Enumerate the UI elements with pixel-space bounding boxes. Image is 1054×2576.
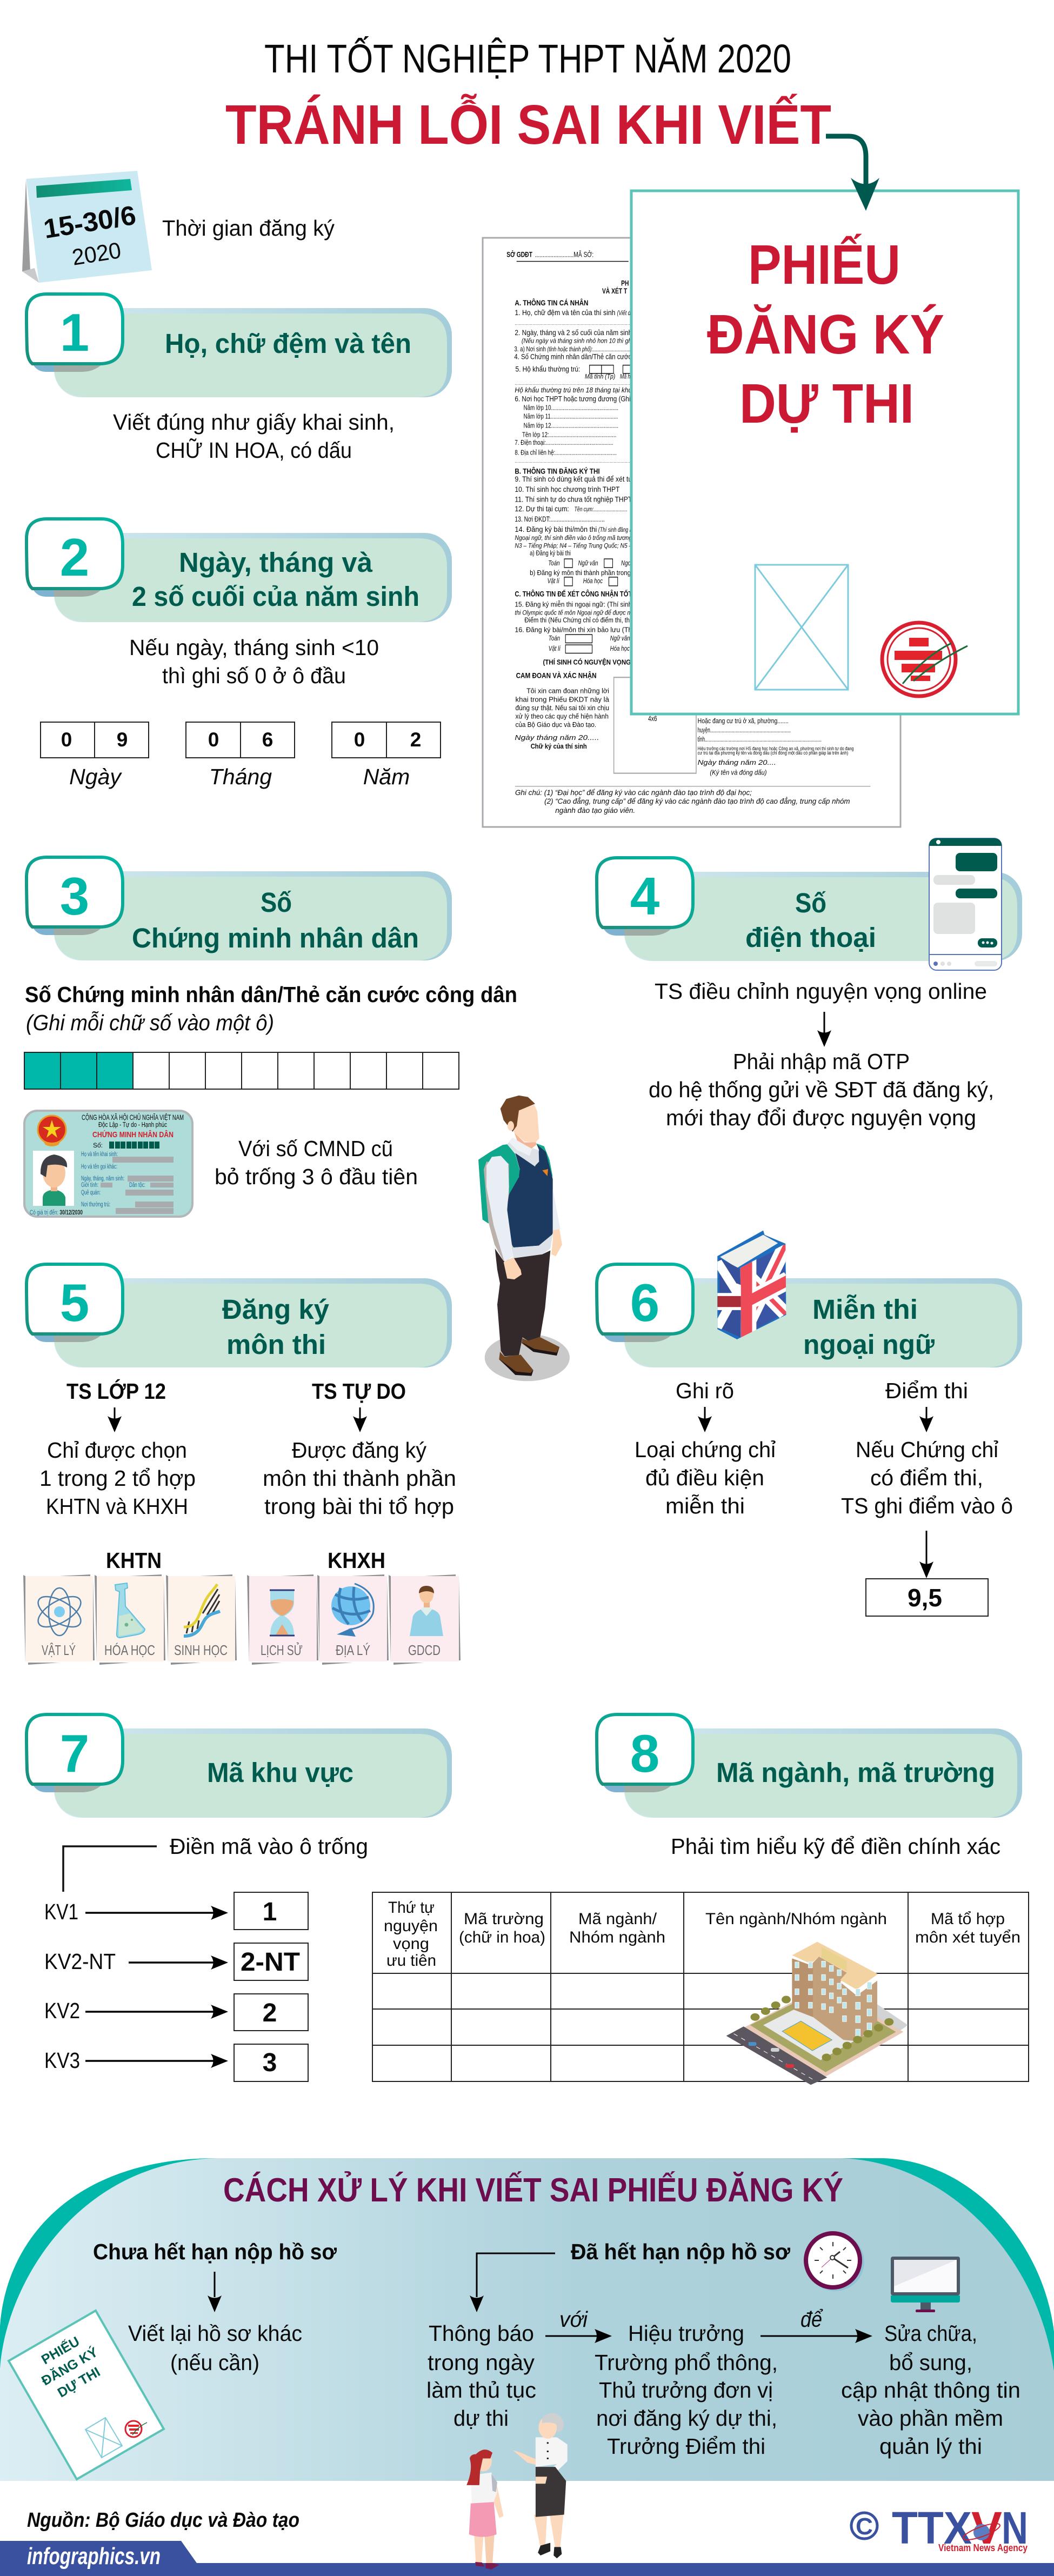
panel: sample registration form (back sheet): khai trong Phiếu ĐKDT này là (516, 696, 610, 704)
text: step 2 detail: thì ghi số 0 ở ô đầu (162, 663, 346, 688)
heading: step 3: Số (261, 887, 292, 918)
chart: area codes: 1 (263, 1898, 277, 1926)
panel: sample registration form (back sheet): 12. Dự thi tại cụm: (515, 505, 569, 513)
panel: step 4 phone: 4 (630, 866, 659, 926)
chart: date input boxes: 6 (262, 729, 273, 751)
panel: sample registration form (back sheet): 3. a) Nơi sinh (tỉnh hoặc thành phố):............................. (514, 345, 630, 353)
text: notify within the day: Thông báo (429, 2321, 534, 2346)
text: note the certificate: miễn thi (665, 1493, 745, 1518)
panel: sample registration form (back sheet): Hóa học (583, 577, 603, 585)
panel: sample registration form (back sheet): 15. Đăng ký miễn thi ngoại ngữ: (Thí sinh (515, 600, 632, 609)
heading: step 2: 2 số cuối của năm sinh (132, 581, 419, 612)
icon: teacher woman (512, 2413, 568, 2558)
panel: sample registration form (back sheet): Mã tỉnh (Tp) (585, 373, 615, 381)
icon: ID card illustration: Nơi thường trú: (81, 1202, 110, 1208)
panel: sample registration form (back sheet): 16. Đăng ký bài/môn thi xin bảo lưu (Th (515, 626, 632, 634)
panel: sample registration form (back sheet): 10. Thí sinh học chương trình THPT (515, 485, 620, 494)
chart: area codes: 2-NT (241, 1948, 300, 1977)
panel: sample registration form (back sheet): Ngoại ngữ, thí sinh điền vào ô trống mã tương (515, 535, 632, 542)
text: before deadline: Chưa hết hạn nộp hồ sơ (93, 2239, 337, 2264)
panel: step 3 ID number (26, 857, 452, 960)
text: independent candidates: môn thi thành phần (263, 1466, 456, 1491)
icon: clock (806, 2233, 864, 2291)
panel: sample registration form (back sheet): .............................................................................................................................. (515, 458, 675, 464)
heading: step 6: Miễn thi (812, 1294, 918, 1325)
chart: date input boxes: Năm (363, 764, 410, 789)
panel: sample registration form (back sheet): 5. Hộ khẩu thường trú: (516, 365, 580, 373)
icon: civics card (389, 1574, 461, 1665)
text: independent candidates: TS TỰ DO (312, 1379, 406, 1404)
chart: area codes: KV3 (44, 2048, 80, 2073)
icon: geography card: ĐỊA LÝ (336, 1642, 370, 1658)
icon: civics card: GDCD (408, 1642, 441, 1658)
panel: sample registration form (back sheet): Ngoại (621, 559, 635, 567)
panel: sample registration form (back sheet): Vật lí (549, 645, 561, 653)
heading: step 6: ngoại ngữ (803, 1329, 935, 1360)
icon: tilted form (9, 2311, 164, 2479)
icon: TTXVN logo: TTX (892, 2502, 972, 2553)
panel: sample registration form (back sheet): 6. Nơi học THPT hoặc tương đương (Ghi (515, 395, 631, 403)
callout: score example: 9,5 (908, 1584, 942, 1612)
chart: wishes table: (chữ in hoa) (459, 1928, 545, 1946)
text: ID number heading (25, 982, 517, 1035)
icon: photo placeholder (755, 565, 848, 690)
text: grade 12 candidates (39, 1379, 196, 1519)
heading: form title (707, 233, 944, 435)
panel: sample registration form (back sheet): Hiệu trưởng các trường nơi HS đang học hoặc Công an xã, phường nơi thí sinh tự do đang (698, 746, 854, 751)
icon: geography card (317, 1574, 389, 1665)
text: step 4 detail: mới thay đổi được nguyện vọng (666, 1105, 976, 1130)
chart: wishes table: môn xét tuyển (915, 1928, 1020, 1946)
panel: sample registration form (back sheet): huyện............................................................... (698, 727, 791, 735)
heading: step 4: điện thoại (745, 922, 876, 953)
panel: sample registration form (back sheet): Tên lớp 12:.............................................. (522, 431, 616, 439)
text: note the certificate: đủ điều kiện (645, 1465, 764, 1490)
icon: student with backpack (478, 1096, 570, 1381)
panel: sample registration form (back sheet): (THÍ SINH CÓ NGUYỆN VỌNG (543, 658, 631, 666)
icon: TTXVN logo: V (971, 2502, 1002, 2553)
heading: step 6 (803, 1294, 935, 1360)
icon: ID card illustration: Độc Lập - Tự do - Hạnh phúc (98, 1120, 167, 1129)
text: step 2 detail (129, 635, 379, 688)
panel: sample registration form (back sheet): Toán (549, 635, 560, 642)
panel: sample registration form (back sheet): a) Đăng ký bài thi (530, 549, 571, 557)
text: exam score (841, 1378, 1013, 1518)
panel: sample registration form (back sheet): 2. Ngày, tháng và 2 số cuối của năm sinh (515, 328, 632, 337)
heading: step 3 (132, 887, 419, 953)
panel: step 6 language exemption: 6 (630, 1273, 659, 1332)
chart: area codes (44, 1892, 308, 2081)
chart: date input boxes: 2 (410, 729, 421, 751)
chart: wishes table: Nhóm ngành (569, 1928, 665, 1946)
icon: tilted form: DỰ THI (55, 2364, 103, 2401)
text: independent candidates (263, 1379, 456, 1519)
text: notify within the day (426, 2321, 536, 2431)
chart: date input boxes: Ngày (69, 764, 122, 789)
panel: step 4 phone (597, 838, 1022, 970)
text: correct data (841, 2321, 1020, 2459)
text: note the certificate: Loại chứng chỉ (635, 1437, 776, 1462)
panel: sample registration form (back sheet): xử lý theo các quy chế hiện hành (516, 712, 609, 720)
panel: sample registration form (back sheet): cư trú tại địa phương ký tên và đóng dấu (chỉ đóng một dấu có phần giáp lai trên ảnh) (698, 750, 849, 756)
panel: sample registration form (back sheet): 13. Nơi ĐKDT:................................... (515, 515, 605, 524)
text: principals: Trưởng Điểm thi (607, 2434, 765, 2459)
arrow: with: với (559, 2307, 589, 2332)
heading: step 5: môn thi (226, 1329, 326, 1360)
panel: sample registration form (back sheet): SỞ GDĐT (506, 250, 532, 259)
icon: ID card illustration: Họ và tên khai sinh: (81, 1151, 118, 1158)
text: website: infographics.vn (27, 2543, 161, 2570)
icon: computer monitor (891, 2257, 960, 2312)
icon: ID card illustration: Số: (93, 1142, 103, 1149)
panel: sample registration form (back sheet): Mã huyện (620, 373, 641, 381)
arrow: bracket to KV1 (63, 1846, 157, 1892)
panel: sample registration form (back sheet): Hoặc đang cư trú ở xã, phường....... (698, 718, 789, 725)
text: old ID note: bỏ trống 3 ô đầu tiên (215, 1164, 418, 1189)
chart: wishes table: Mã ngành/ (578, 1910, 657, 1928)
panel: sample registration form (back sheet): Ngữ văn (610, 635, 630, 642)
panel: sample registration form (back sheet): ngành đào tạo giáo viên. (555, 806, 635, 815)
text: step 1 detail: CHỮ IN HOA, có dấu (156, 438, 352, 463)
panel: step 6 language exemption (597, 1231, 1022, 1367)
text: grade 12 candidates: Chỉ được chọn (47, 1438, 187, 1463)
icon: chemistry card (95, 1574, 165, 1665)
panel: sample registration form (back sheet): 11. Thí sinh tự do chưa tốt nghiệp THPT (515, 495, 632, 504)
icon: calendar with registration dates: 15-30/6 (42, 200, 138, 244)
text: exam score: Nếu Chứng chỉ (856, 1437, 998, 1462)
panel: sample registration form (back sheet): 4x6 (648, 714, 657, 723)
panel: step 1 name (26, 294, 452, 397)
panel: step 8 major and school code (597, 1714, 1022, 1818)
panel: step 7 area code: 7 (60, 1724, 89, 1783)
icon: portrait photo (33, 1151, 74, 1206)
panel: sample registration form (back sheet): .............................................................................................................................. (515, 381, 675, 386)
panel: sample registration form (back sheet): Ngày tháng năm 20.... (698, 759, 776, 767)
panel: sample registration form (back sheet): Điểm thi (Nếu Chứng chỉ có điểm thi, thí (524, 617, 631, 624)
panel: step 2 date of birth (26, 519, 452, 622)
panel: how to handle mistakes (0, 2158, 1054, 2481)
arrow: step 4 (817, 1012, 831, 1047)
arrow: from headline to form (826, 136, 879, 211)
panel: sample registration form (back sheet): Ngày tháng năm 20..... (515, 734, 599, 742)
text: registration period: Thời gian đăng ký (162, 216, 335, 241)
icon: physics card: VẬT LÝ (42, 1642, 76, 1658)
heading: step 4: Số (795, 887, 826, 918)
panel: sample registration form (back sheet): Năm lớp 10.............................................. (524, 404, 618, 412)
icon: copyright mark (851, 2513, 877, 2540)
panel: step 5 exam subjects: 5 (60, 1273, 89, 1332)
panel: sample registration form (back sheet): .........................MÃ SỞ: (535, 250, 593, 259)
panel: sample registration form (back sheet): (2) “Cao đẳng, trung cấp” để đăng ký vào các ngành đào tạo trình độ cao đẳng, trung cấp nhóm (544, 796, 850, 805)
panel: sample registration form (back sheet): B. THÔNG TIN ĐĂNG KÝ THI (515, 466, 600, 476)
chart: wishes table: nguyện (384, 1917, 438, 1935)
text: independent candidates: Được đăng ký (292, 1438, 426, 1463)
text: KHXH label: KHXH (328, 1548, 385, 1573)
text: correct data: Sửa chữa, (884, 2321, 977, 2346)
text: independent candidates: trong bài thi tổ hợp (264, 1494, 454, 1519)
text: notify within the day: làm thủ tục (426, 2378, 536, 2403)
text: grade 12 candidates: 1 trong 2 tổ hợp (39, 1466, 196, 1491)
panel: sample registration form (back sheet): Năm lớp 11.............................................. (524, 412, 618, 421)
text: ID number heading: (Ghi mỗi chữ số vào một ô) (26, 1010, 274, 1035)
panel: sample registration form (back sheet): (Viết đúng như giấy khai sinh) (617, 310, 679, 317)
heading: step 4 (745, 887, 876, 953)
panel: sample registration form (back sheet): A. THÔNG TIN CÁ NHÂN (515, 298, 589, 307)
chart: date input boxes: Tháng (209, 764, 272, 789)
panel: sample registration form (back sheet): VÀ XÉT T (602, 286, 628, 295)
panel: sample registration form (back sheet): 8. Địa chỉ liên hệ:.......................................... (515, 449, 617, 457)
panel: sample registration form (back sheet): (Nếu ngày và tháng sinh nhỏ hơn 10 thì ghi (522, 337, 633, 345)
chart: date input boxes: 0 (208, 729, 219, 751)
text: after deadline: Đã hết hạn nộp hồ sơ (571, 2239, 791, 2264)
text: correct data: bổ sung, (889, 2350, 972, 2375)
panel: sample registration form (back sheet): b) Đăng ký môn thi thành phần trong (530, 569, 631, 577)
panel: sample registration form (back sheet): Toán (548, 559, 560, 567)
text: before deadline: (nếu cần) (170, 2350, 259, 2375)
panel: sample registration form (back sheet): 14. Đăng ký bài thi/môn thi (515, 525, 597, 534)
panel: sample registration form (back sheet): 4. Số Chứng minh nhân dân/Thẻ căn cước (514, 352, 631, 361)
text: step 1 detail: Viết đúng như giấy khai sinh, (113, 410, 395, 435)
panel: form cover sheet (631, 191, 1018, 714)
text: correct data: quản lý thi (879, 2434, 982, 2459)
panel: step 3 ID number: 3 (60, 866, 89, 926)
chart: 12 ID digit cells (24, 1052, 459, 1089)
icon: red seal with signature (882, 623, 968, 696)
chart: date input boxes: 9 (117, 729, 128, 751)
chart: area codes: 3 (263, 2048, 277, 2077)
chart: area codes: 2 (263, 1999, 277, 2027)
text: before deadline: Viết lại hồ sơ khác (128, 2321, 302, 2346)
chart: wishes table (372, 1892, 1029, 2081)
heading: panel title: CÁCH XỬ LÝ KHI VIẾT SAI PHIẾU ĐĂNG KÝ (223, 2172, 843, 2209)
arrow: in order to (761, 2307, 872, 2343)
icon: tilted form: PHIẾU (38, 2333, 82, 2367)
icon: ID card illustration: Có giá trị đến: 30/12/2030 (30, 1210, 83, 1216)
icon: ID card illustration: Họ và tên gọi khác: (81, 1164, 117, 1170)
text: correct data: cập nhật thông tin (841, 2378, 1020, 2403)
footer bar (0, 2541, 1054, 2576)
title: red headline: TRÁNH LỖI SAI KHI VIẾT (225, 93, 831, 156)
icon: calendar with registration dates: 2020 (70, 237, 123, 270)
panel: sample registration form (back sheet): Ghi chú: (1) “Đại học” để đăng ký vào các ngành đào tạo trình độ đại học; (515, 788, 752, 797)
icon: ID card illustration: Quê quán: (81, 1190, 101, 1196)
heading: step 7: Mã khu vực (207, 1757, 353, 1788)
text: step 4 detail: TS điều chỉnh nguyện vọng online (655, 979, 987, 1004)
panel: sample registration form (back sheet): CAM ĐOAN VÀ XÁC NHẬN (516, 671, 597, 680)
icon: ID card illustration: CỘNG HÒA XÃ HỘI CHỦ NGHĨA VIỆT NAM (82, 1112, 184, 1122)
panel: sample registration form (back sheet): của Bộ Giáo dục và Đào tạo. (516, 720, 596, 729)
chart: date input boxes (41, 722, 441, 789)
heading: form title: ĐĂNG KÝ (707, 303, 944, 365)
panel: sample registration form (back sheet): Hộ khẩu thường trú trên 18 tháng tại khu (515, 386, 632, 395)
text: principals: Thủ trưởng đơn vị (599, 2378, 773, 2403)
icon: ID card illustration: CHỨNG MINH NHÂN DÂN (92, 1130, 174, 1139)
icon: ID card illustration: Ngày, tháng, năm sinh: (81, 1176, 124, 1182)
text: notify within the day: trong ngày (428, 2350, 535, 2375)
panel: sample registration form (back sheet): PH (621, 279, 629, 288)
text: step 4 detail: do hệ thống gửi về SĐT đã đăng ký, (649, 1077, 994, 1102)
text: source: Nguồn: Bộ Giáo dục và Đào tạo (27, 2509, 299, 2532)
text: step 8 detail: Phải tìm hiểu kỹ để điền chính xác (671, 1834, 1000, 1859)
chart: area codes: KV2 (44, 1998, 80, 2023)
panel: step 8 major and school code: 8 (630, 1724, 659, 1783)
panel: sample registration form (back sheet): Hóa học (610, 645, 630, 653)
icon: national emblem (38, 1116, 66, 1146)
chart: date input boxes: 0 (354, 729, 365, 751)
icon: chemistry card: HÓA HỌC (104, 1642, 155, 1658)
text: exam score: có điểm thi, (870, 1465, 983, 1490)
panel: step 7 area code (26, 1714, 452, 1818)
text: principals (595, 2321, 778, 2459)
panel: sample registration form (back sheet): .............................................................................................................................. (515, 321, 675, 326)
text: grade 12 candidates: TS LỚP 12 (66, 1379, 166, 1404)
chart: area codes: KV2-NT (44, 1949, 116, 1974)
text: step 2 detail: Nếu ngày, tháng sinh <10 (129, 635, 379, 660)
text: exam score: TS ghi điểm vào ô (841, 1493, 1013, 1518)
icon: calendar with registration dates (22, 171, 152, 283)
panel: step 5 exam subjects (26, 1264, 452, 1367)
chart: area codes: KV1 (44, 1899, 78, 1924)
panel: sample registration form (back sheet): 9. Thí sinh có dùng kết quả thi để xét tu (515, 475, 632, 484)
icon: biology card (166, 1574, 237, 1665)
panel: sample registration form (back sheet): Tôi xin cam đoan những lời (526, 687, 609, 695)
panel: sample registration form (back sheet): C. THÔNG TIN ĐỂ XÉT CÔNG NHẬN TỐT (515, 589, 632, 598)
text: note the certificate: Ghi rõ (676, 1378, 734, 1403)
panel: sample registration form (back sheet): đúng sự thật. Nếu sai tôi xin chịu (516, 704, 609, 712)
panel: step 1 name: 1 (60, 303, 89, 362)
panel: sample registration form (back sheet): 1. Họ, chữ đệm và tên của thí sinh (515, 309, 616, 317)
panel: sample registration form (back sheet): Năm lớp 12.............................................. (524, 422, 618, 430)
text: step 4 detail (649, 979, 994, 1130)
panel: sample registration form (back sheet): Chữ ký của thí sinh (531, 743, 587, 751)
icon: history card: LỊCH SỬ (261, 1641, 303, 1658)
icon: tilted form: ĐĂNG KÝ (38, 2344, 101, 2388)
icon: smartphone chat (929, 838, 1002, 970)
panel: sample registration form (back sheet): (Thí sinh đăng ký) (598, 527, 636, 534)
panel: sample registration form (back sheet): 7. Điện thoại:.............................................. (515, 439, 613, 446)
panel: sample registration form (back sheet): Vật lí (548, 577, 560, 585)
text: step 1 detail (113, 410, 395, 463)
heading: step 8: Mã ngành, mã trường (716, 1757, 995, 1788)
panel: sample registration form (back sheet): tỉnh............................................................................................. (698, 736, 822, 743)
text: principals: Hiệu trưởng (628, 2321, 744, 2346)
icon: student girl (466, 2450, 503, 2570)
icon: TTXVN logo: Vietnam News Agency (938, 2542, 1028, 2553)
icon: school building (726, 1942, 908, 2085)
text: note the certificate (635, 1378, 776, 1518)
icon: history card (247, 1574, 318, 1665)
text: principals: Trường phổ thông, (595, 2350, 778, 2375)
panel: step 2 date of birth: 2 (60, 528, 89, 587)
text: principals: nơi đăng ký dự thi, (596, 2406, 777, 2431)
panel: sample registration form (back sheet) (483, 238, 900, 827)
text: old ID note (215, 1136, 418, 1189)
chart: wishes table: Mã tổ hợp (931, 1910, 1005, 1928)
chart: wishes table: ưu tiên (386, 1952, 436, 1970)
heading: step 5 (222, 1294, 330, 1360)
icon: ID card illustration (24, 1111, 192, 1217)
chart: wishes table: Mã trường (464, 1910, 544, 1928)
panel: sample registration form (back sheet): thi Olympic quốc tế môn Ngoại ngữ để được m (515, 609, 632, 617)
arrow: after deadline bracket (470, 2253, 555, 2312)
heading: form title: DỰ THI (739, 372, 914, 435)
heading: step 3: Chứng minh nhân dân (132, 923, 419, 953)
arrow: to score box (919, 1531, 933, 1578)
heading: step 2 (132, 547, 419, 612)
text: ID number heading: Số Chứng minh nhân dân/Thẻ căn cước công dân (25, 982, 517, 1007)
icon: biology card: SINH HỌC (174, 1642, 228, 1658)
callout: score example (866, 1579, 988, 1616)
text: KHTN label: KHTN (106, 1548, 162, 1573)
panel: sample registration form (back sheet): Tên cụm:.......................... (574, 506, 628, 513)
icon: ID card illustration: Dân tộc: (129, 1182, 145, 1189)
text: exam score: Điểm thi (885, 1378, 968, 1403)
chart: wishes table: Tên ngành/Nhóm ngành (705, 1910, 887, 1928)
text: step 4 detail: Phải nhập mã OTP (733, 1049, 910, 1074)
arrow: with (545, 2307, 612, 2343)
icon: ID card illustration: Giới tính: (81, 1182, 98, 1189)
icon: copyright mark: C (856, 2513, 873, 2540)
text: grade 12 candidates: KHTN và KHXH (46, 1494, 188, 1519)
panel: sample registration form (back sheet): Ngữ văn (578, 559, 598, 567)
panel: sample registration form (back sheet): (Ký tên và đóng dấu) (710, 769, 767, 777)
heading: step 1: Họ, chữ đệm và tên (165, 328, 411, 359)
chart: wishes table: vọng (393, 1935, 429, 1953)
panel: sample registration form (back sheet): N3 – Tiếng Pháp; N4 – Tiếng Trung Quốc; N5 – (515, 542, 632, 550)
icon: British flag book (714, 1231, 790, 1339)
icon: physics card (23, 1574, 95, 1665)
heading: form title: PHIẾU (748, 233, 900, 296)
text: before deadline (93, 2239, 337, 2375)
chart: date input boxes: 0 (61, 729, 72, 751)
icon: TTXVN logo (892, 2502, 1028, 2553)
chart: wishes table: Thứ tự (388, 1899, 435, 1917)
arrow: in order to: để (800, 2307, 823, 2332)
text: fill in code: Điền mã vào ô trống (170, 1834, 368, 1859)
icon: TTXVN logo: N (1002, 2502, 1028, 2553)
text: notify within the day: dự thi (453, 2406, 509, 2431)
text: old ID note: Với số CMND cũ (238, 1136, 393, 1161)
text: correct data: vào phần mềm (858, 2406, 1003, 2431)
heading: step 2: Ngày, tháng và (179, 547, 373, 578)
heading: step 5: Đăng ký (222, 1294, 330, 1325)
title: exam name: THI TỐT NGHIỆP THPT NĂM 2020 (264, 36, 791, 81)
